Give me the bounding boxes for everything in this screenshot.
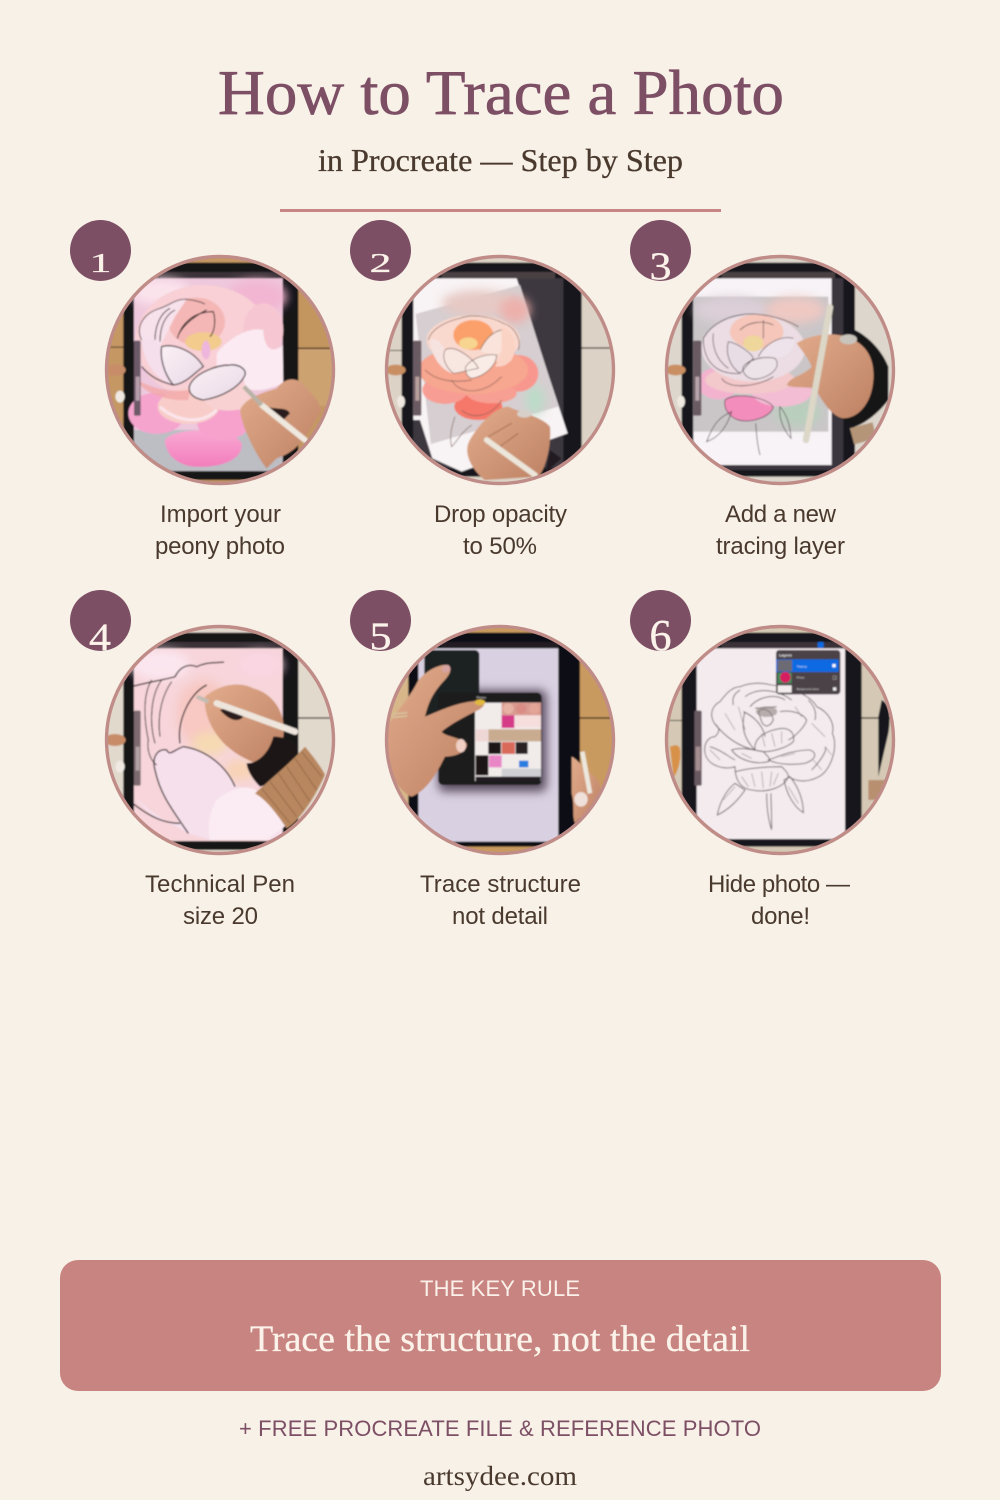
website: artsydee.com xyxy=(423,1461,577,1491)
step 6 caption: done! xyxy=(751,903,810,930)
step 4 caption xyxy=(145,871,295,930)
step 2 caption xyxy=(434,501,567,560)
step 1 photo: tracing peony with outlines on tablet xyxy=(103,253,337,487)
step 4 caption: Technical Pen xyxy=(145,871,295,898)
step 6 xyxy=(630,590,898,930)
step 4 badge xyxy=(70,590,131,659)
step 3 caption: Add a new xyxy=(725,501,837,528)
step 3 badge: 3 xyxy=(650,245,671,288)
step 6 photo: finished line drawing with layers panel: Photo xyxy=(797,676,805,680)
step 2 xyxy=(350,220,618,560)
step 6 caption xyxy=(708,871,850,930)
step 1 ring xyxy=(106,256,334,484)
step 6 badge: 6 xyxy=(650,611,672,660)
free file note: + FREE PROCREATE FILE & REFERENCE PHOTO xyxy=(239,1416,761,1441)
step 2 caption: to 50% xyxy=(463,533,537,560)
step 6 caption: Hide photo — xyxy=(708,871,850,898)
step 2 caption: Drop opacity xyxy=(434,501,567,528)
step 1 caption: Import your xyxy=(160,501,281,528)
step 5 ring xyxy=(386,626,614,854)
key rule eyebrow: THE KEY RULE xyxy=(420,1276,580,1301)
step 3 badge xyxy=(630,220,691,288)
step 3 ring xyxy=(666,256,894,484)
step 3 caption: tracing layer xyxy=(716,533,845,560)
step 3 caption xyxy=(716,501,845,560)
key rule statement: Trace the structure, not the detail xyxy=(250,1319,750,1360)
key rule panel xyxy=(60,1260,941,1391)
step 6 badge xyxy=(630,590,691,660)
step 1 caption: peony photo xyxy=(155,533,285,560)
step 4 badge: 4 xyxy=(89,616,111,659)
step 3 xyxy=(630,220,898,560)
step 5 photo: blank lavender canvas with photos picker and hand xyxy=(382,623,618,857)
step 5 photo: blank lavender canvas with photos picker and hand: Photos xyxy=(477,696,486,700)
title: How to Trace a Photo xyxy=(218,58,784,128)
step 1 caption xyxy=(155,501,285,560)
step 4 ring xyxy=(106,626,334,854)
step 2 photo: lowered opacity salmon peony on rotated canvas xyxy=(382,253,618,487)
step 6 photo: finished line drawing with layers panel: Tracing xyxy=(797,664,807,668)
step 6 ring xyxy=(666,626,894,854)
step 2 badge xyxy=(350,220,411,281)
step 5 xyxy=(350,590,618,930)
step 4 photo: technical pen close-up with sweater sleeve xyxy=(103,623,337,857)
step 1 badge: 1 xyxy=(90,247,111,278)
step 6 photo: finished line drawing with layers panel: Layers xyxy=(779,653,793,658)
subtitle: in Procreate — Step by Step xyxy=(318,142,683,178)
step 1 xyxy=(70,220,337,560)
step 4 caption: size 20 xyxy=(183,903,258,930)
step 1 badge xyxy=(70,220,131,281)
step 6 photo: finished line drawing with layers panel: Background colour xyxy=(797,687,819,691)
step 5 badge: 5 xyxy=(370,615,391,658)
step 3 photo: new tracing layer over faded peony xyxy=(662,253,898,487)
step 5 badge xyxy=(350,590,411,658)
step 5 caption: not detail xyxy=(452,903,548,930)
step 4 xyxy=(70,590,337,930)
step 5 caption xyxy=(420,871,581,930)
step 2 badge: 2 xyxy=(370,247,391,278)
step 5 caption: Trace structure xyxy=(420,871,581,898)
step 6 photo: finished line drawing with layers panel xyxy=(662,623,898,857)
step 2 ring xyxy=(386,256,614,484)
